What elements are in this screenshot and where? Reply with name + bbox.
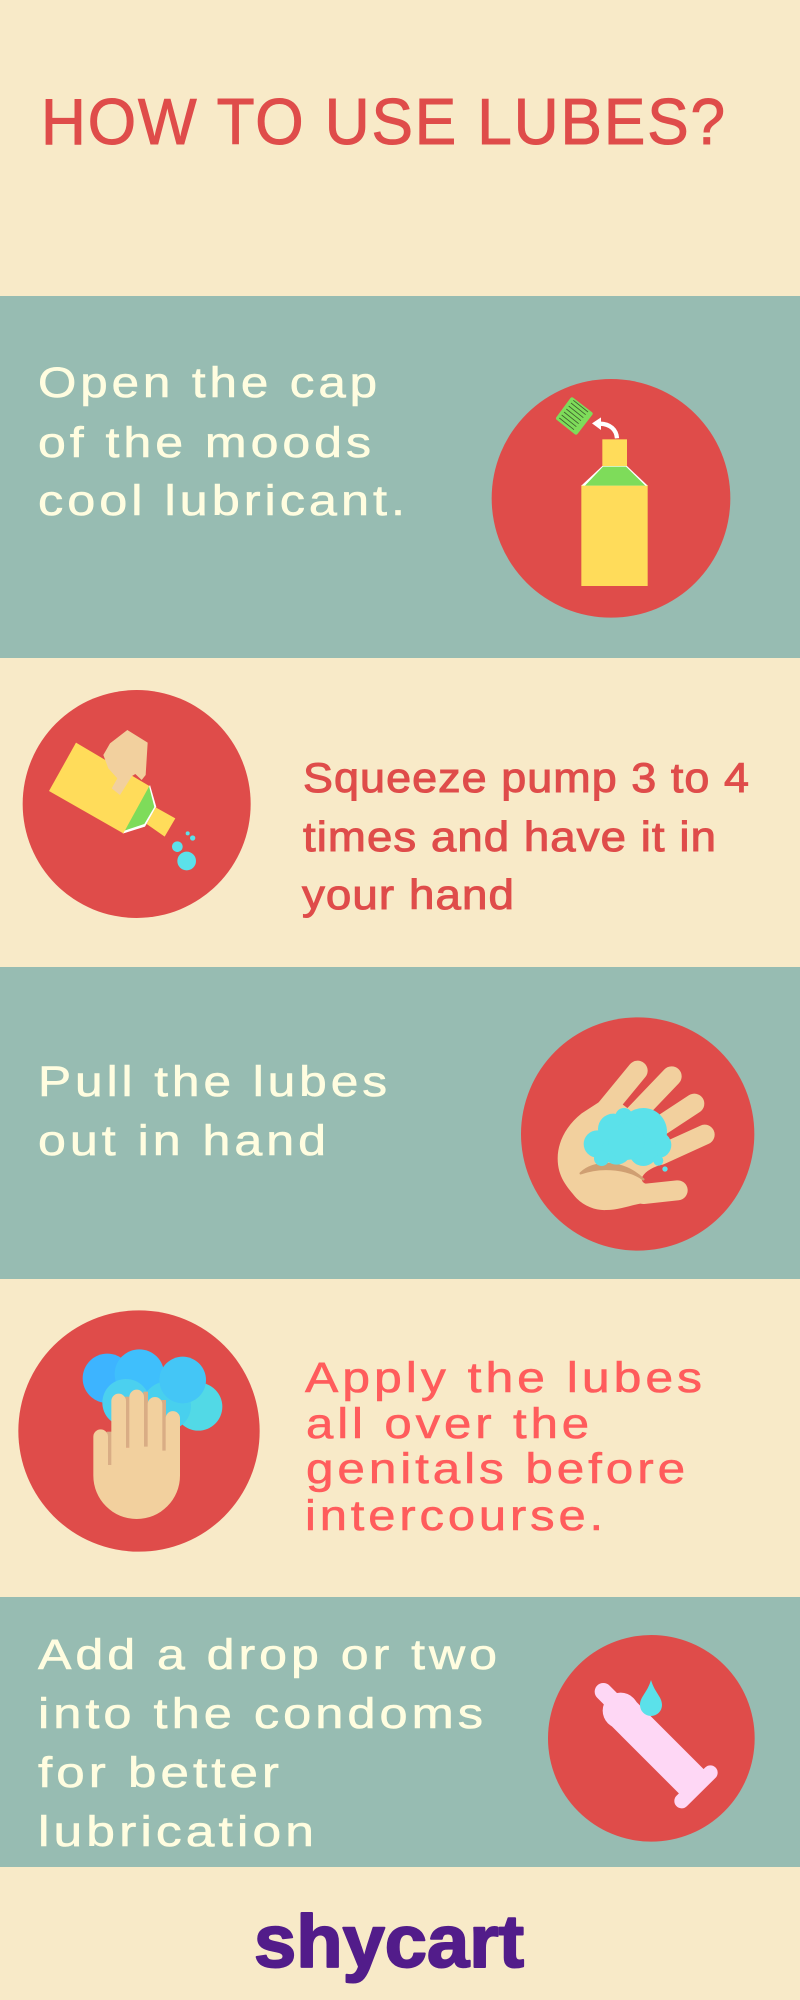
step 5 text: Add a drop or two — [38, 1631, 501, 1679]
title: HOW TO USE LUBES? — [41, 85, 727, 158]
step 4 text: intercourse. — [305, 1492, 607, 1540]
step 4 text: all over the — [306, 1400, 593, 1448]
icon: hand with lube foam — [521, 1017, 754, 1251]
icon: condom with drop — [548, 1635, 755, 1842]
step 3 text: Pull the lubes — [38, 1058, 391, 1106]
step 2 text: Squeeze pump 3 to 4 — [303, 754, 750, 801]
step 3 text: out in hand — [38, 1117, 330, 1165]
panel: step 4 apply the lubes — [0, 1279, 800, 1597]
step 2 text: your hand — [302, 871, 515, 918]
step 1 text: of the moods — [38, 419, 375, 467]
panel: header — [0, 0, 800, 296]
step 2 text: times and have it in — [303, 813, 717, 860]
step 2 text — [302, 754, 750, 918]
icon: hand with blue bubbles — [18, 1310, 260, 1552]
panel: step 5 add to condoms — [0, 1597, 800, 1867]
step 5 text — [38, 1631, 501, 1856]
step 4 text — [305, 1354, 706, 1540]
step 4 text: Apply the lubes — [305, 1354, 706, 1402]
step 5 text: for better — [38, 1749, 283, 1797]
panel: footer — [0, 1867, 800, 2000]
step 1 text: Open the cap — [38, 359, 381, 407]
panel: step 3 pull the lubes — [0, 967, 800, 1279]
logo: shycart: shycart — [254, 1900, 524, 1983]
panel: step 2 squeeze pump — [0, 658, 800, 967]
step 1 text — [38, 359, 409, 525]
step 1 text: cool lubricant. — [38, 477, 409, 525]
panel: step 1 open the cap — [0, 296, 800, 658]
icon: hand squeezing bottle — [23, 690, 251, 918]
step 5 text: lubrication — [38, 1808, 318, 1856]
step 4 text: genitals before — [306, 1445, 689, 1493]
icon: bottle with cap removed — [492, 379, 730, 618]
step 3 text — [38, 1058, 391, 1165]
step 5 text: into the condoms — [38, 1690, 487, 1738]
